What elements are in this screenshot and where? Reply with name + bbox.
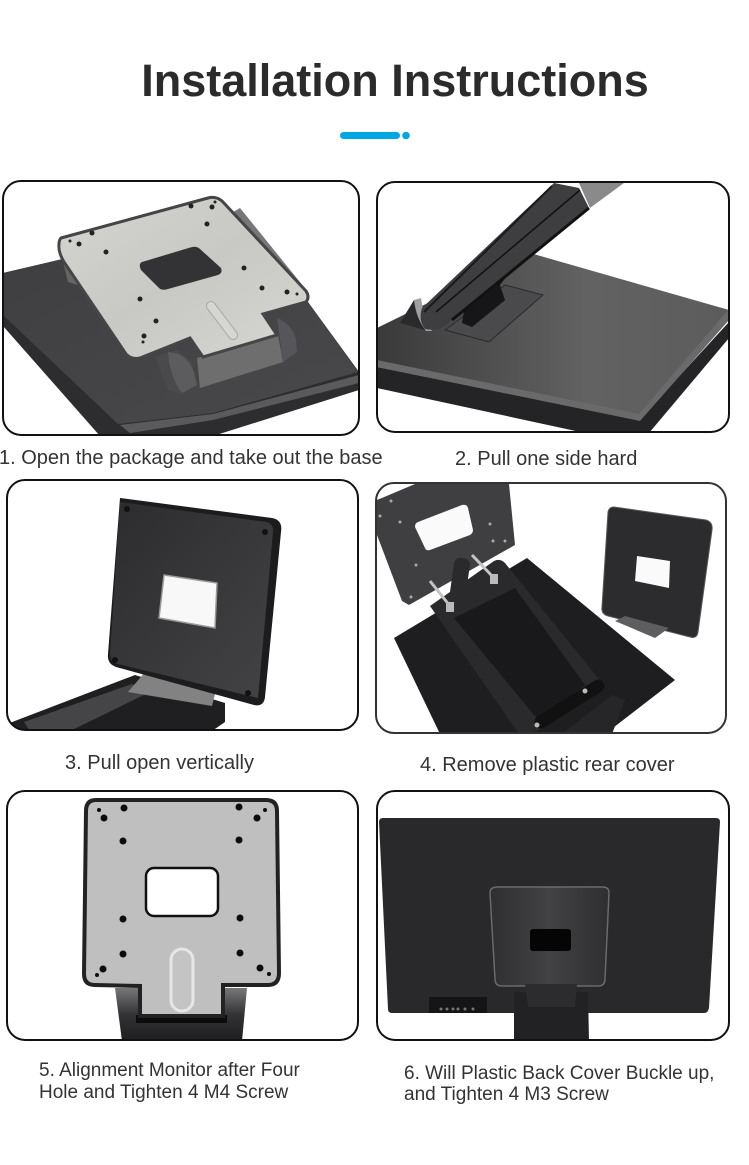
plate supports and screws — [430, 555, 498, 612]
base — [7, 675, 225, 731]
ports — [429, 997, 487, 1013]
caption: step 5: Hole and Tighten 4 M4 Screw — [39, 1082, 289, 1103]
rear edge of mount — [234, 208, 303, 286]
base top — [377, 253, 729, 417]
panel — [108, 498, 281, 705]
panel: step 3 photo — [7, 480, 358, 731]
caption: step 6: and Tighten 4 M3 Screw — [404, 1084, 609, 1105]
metal plate — [377, 484, 515, 605]
window — [159, 575, 217, 628]
panel: step 2 photo — [377, 182, 729, 433]
panel: step 1 photo — [3, 181, 359, 436]
panel: step 5 photo — [7, 791, 358, 1041]
slot — [171, 949, 193, 1011]
title: Installation Instructions — [141, 55, 649, 106]
cover tab — [615, 616, 669, 638]
caption: step 6: 6. Will Plastic Back Cover Buckle up, — [404, 1063, 714, 1084]
tab front — [197, 335, 283, 388]
upper arm — [579, 183, 624, 208]
caption: step 1: 1. Open the package and take out the base — [0, 447, 383, 469]
caption: step 4: 4. Remove plastic rear cover — [420, 754, 675, 776]
base — [394, 558, 675, 734]
hinge end — [400, 300, 426, 330]
screws — [112, 506, 268, 696]
hinge — [128, 674, 215, 706]
plate window — [415, 505, 473, 550]
metal plate — [59, 197, 308, 358]
mount window — [530, 929, 571, 951]
panel: step 6 photo — [377, 791, 729, 1041]
hinges — [168, 318, 297, 393]
plate holes — [378, 500, 506, 598]
cover window — [635, 556, 670, 588]
plate — [84, 800, 279, 1016]
recess — [445, 285, 543, 342]
hinge bar — [534, 686, 598, 728]
arm — [421, 183, 589, 330]
square window — [140, 247, 222, 290]
slot — [211, 306, 233, 335]
panel: step 4 photo — [376, 483, 726, 734]
mounting holes — [95, 804, 271, 977]
stand — [115, 988, 247, 1041]
base plate — [3, 258, 359, 436]
hinge — [525, 984, 577, 1007]
monitor back — [379, 818, 720, 1013]
base front and side — [377, 309, 729, 433]
rear cover — [602, 507, 712, 637]
support under arm — [462, 278, 505, 327]
rear mount — [490, 887, 609, 986]
mounting holes — [68, 200, 298, 344]
caption: step 2: 2. Pull one side hard — [455, 448, 637, 470]
stand arm — [430, 560, 602, 734]
stand — [514, 992, 589, 1041]
caption: step 5: 5. Alignment Monitor after Four — [39, 1060, 301, 1081]
window — [146, 868, 218, 916]
caption: step 3: 3. Pull open vertically — [65, 752, 254, 774]
title accent: blue bar and dot — [340, 132, 410, 139]
